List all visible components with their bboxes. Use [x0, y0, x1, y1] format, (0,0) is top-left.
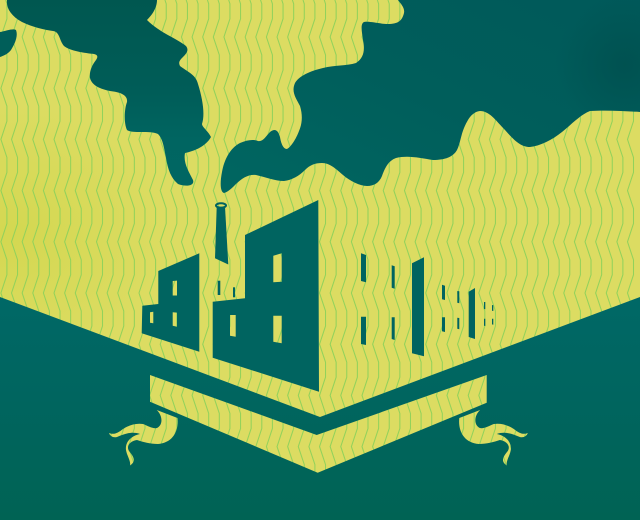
factory: right building [213, 200, 319, 392]
smoke: large cloud from chimney to top right [221, 0, 640, 193]
ghost building: window slits on the right [361, 253, 493, 356]
smoke: main plume [7, 0, 211, 186]
factory: chimney [215, 203, 235, 297]
factory: left building [142, 253, 199, 352]
lower panel with banner and ribbon tails cut out [0, 297, 640, 520]
smoke: small blob at left edge [0, 29, 17, 57]
